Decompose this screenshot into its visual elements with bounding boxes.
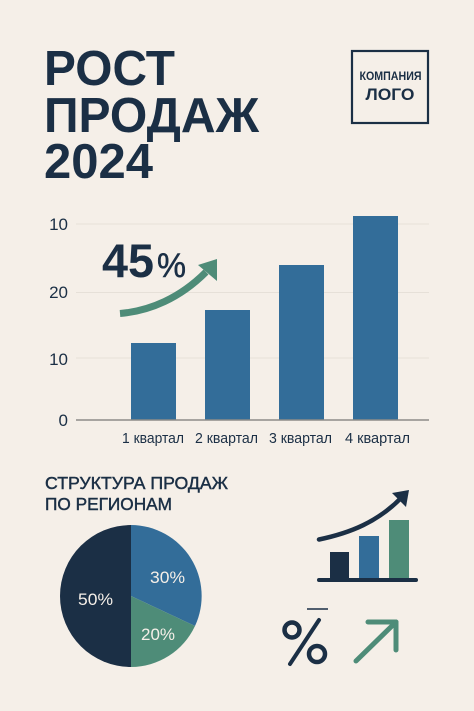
- growth callout 45%: %: [157, 247, 186, 285]
- icon: green arrow: [356, 622, 396, 661]
- title: ПРОДАЖ: [44, 89, 260, 143]
- quarter labels: 4 квартал: [345, 430, 410, 447]
- arrow: growth: [120, 259, 217, 314]
- logo box: ЛОГО: [366, 85, 414, 104]
- y axis labels: 20: [49, 283, 68, 302]
- pie chart: 20%: [141, 626, 175, 644]
- quarter labels: 1 квартал: [122, 430, 184, 447]
- section heading: regions: [45, 473, 228, 514]
- pie chart: 50%: [78, 591, 113, 609]
- y axis labels: [49, 215, 68, 430]
- bars: [131, 216, 398, 420]
- quarter labels: [122, 430, 410, 447]
- quarter labels: 3 квартал: [269, 430, 332, 447]
- quarter labels: 2 квартал: [195, 430, 258, 447]
- section heading: regions: ПО РЕГИОНАМ: [45, 494, 172, 514]
- title: РОСТ: [44, 42, 175, 96]
- title: [44, 42, 260, 189]
- pie chart: 30%: [150, 569, 185, 587]
- y axis labels: 10: [49, 350, 68, 369]
- logo box: [352, 51, 428, 123]
- growth callout 45%: [102, 234, 217, 314]
- growth callout 45%: 45: [102, 234, 154, 287]
- bar chart: [49, 215, 429, 447]
- icon: percent: [284, 609, 328, 664]
- y axis labels: 10: [49, 215, 68, 234]
- section heading: regions: СТРУКТУРА ПРОДАЖ: [45, 473, 228, 493]
- pie chart: [60, 525, 202, 667]
- y axis labels: 0: [59, 411, 68, 430]
- logo box: КОМПАНИЯ: [360, 71, 422, 83]
- title: 2024: [44, 135, 153, 189]
- icon: growth bars: [319, 490, 416, 580]
